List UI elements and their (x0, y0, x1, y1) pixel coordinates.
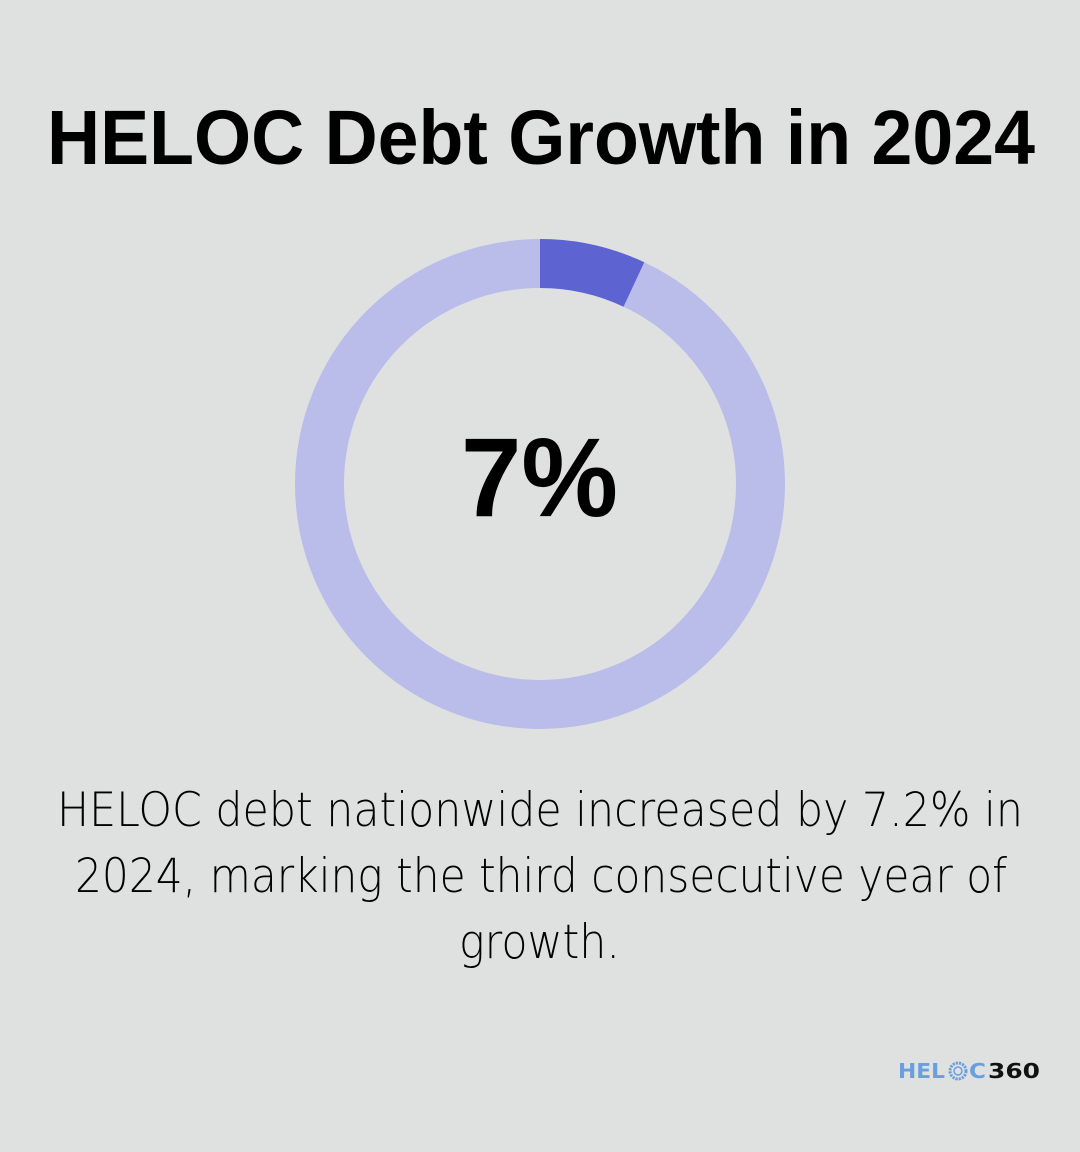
logo icon: swirl O (950, 1063, 966, 1079)
logo wordmark: HEL: HEL (898, 1059, 945, 1083)
description text: growth. (459, 915, 620, 970)
logo: HELOC360 (898, 1059, 1040, 1083)
donut track (320, 264, 760, 704)
logo wordmark: C: C (969, 1059, 986, 1083)
description text (57, 783, 1023, 970)
donut segment: 7% (540, 239, 644, 307)
title: HELOC Debt Growth in 2024 (47, 95, 1035, 181)
donut chart (320, 239, 760, 704)
logo wordmark: 360: 360 (988, 1059, 1040, 1083)
description text: 2024, marking the third consecutive year of (75, 849, 1007, 904)
center value: 7% (461, 415, 618, 540)
